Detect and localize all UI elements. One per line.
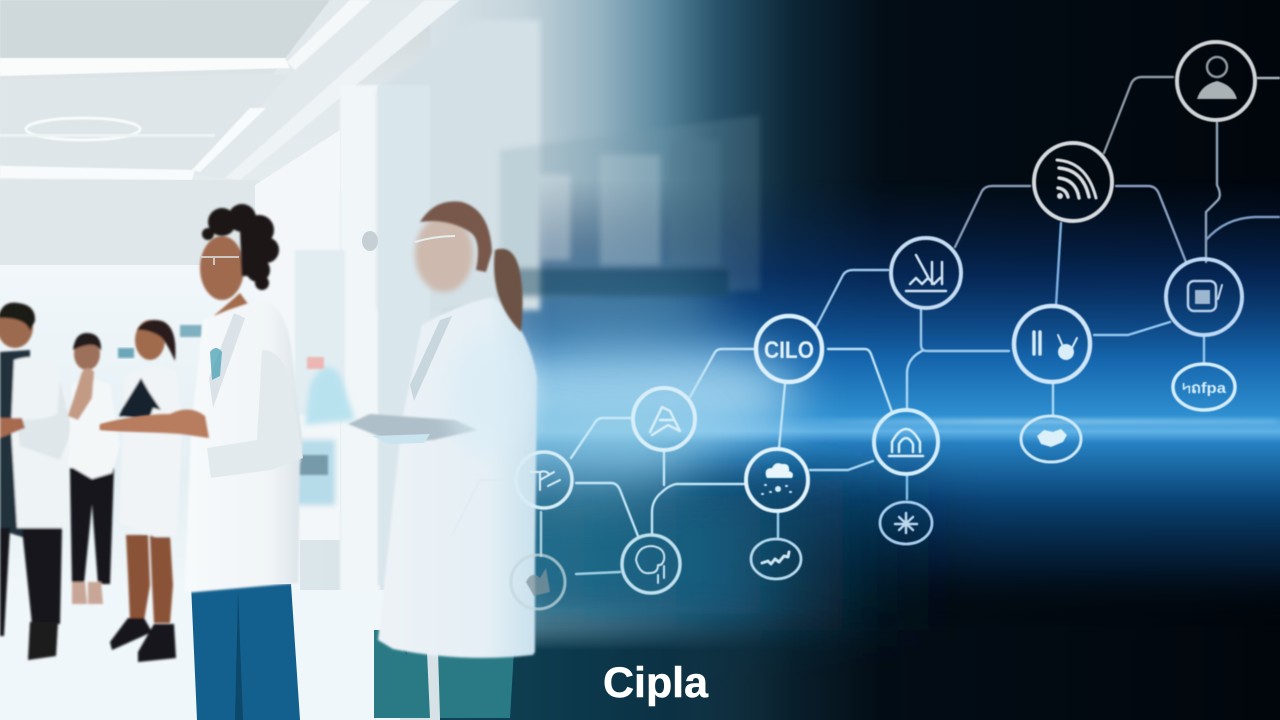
node: equipment <box>891 238 961 308</box>
node: wifi <box>1034 143 1112 221</box>
node: cloud <box>746 449 808 511</box>
lab walls <box>0 20 540 720</box>
node: molecule <box>633 388 695 450</box>
brand logo: Cipla: Cipla <box>603 659 709 707</box>
scientist: woman holding dark folder <box>100 320 182 662</box>
node: faint bottom-left <box>511 555 565 609</box>
node: small oval bottom <box>751 539 801 579</box>
scientist: woman in black trousers <box>68 333 120 604</box>
scientist: man on the left <box>0 303 72 660</box>
connector lines <box>452 77 1279 574</box>
node: biotech <box>1014 306 1090 382</box>
node: small oval right <box>1173 364 1235 410</box>
node: small oval centre <box>1021 416 1081 462</box>
scientist: woman with tablet in foreground <box>348 201 537 718</box>
node: top person <box>1177 42 1255 120</box>
node: processor <box>1166 259 1242 335</box>
scientist: main woman <box>100 204 303 720</box>
node: brain <box>622 535 680 593</box>
node: CILO: CILO <box>764 337 814 364</box>
node: CILO <box>756 316 822 382</box>
node: small oval lower <box>880 502 932 544</box>
node: arch <box>874 410 938 474</box>
node: flow <box>516 452 572 508</box>
node: small oval right: ৸ถfpa <box>1182 380 1227 397</box>
lab ceiling <box>0 0 460 190</box>
network diagram <box>452 42 1279 609</box>
lab shelves (blurred) <box>500 115 760 300</box>
